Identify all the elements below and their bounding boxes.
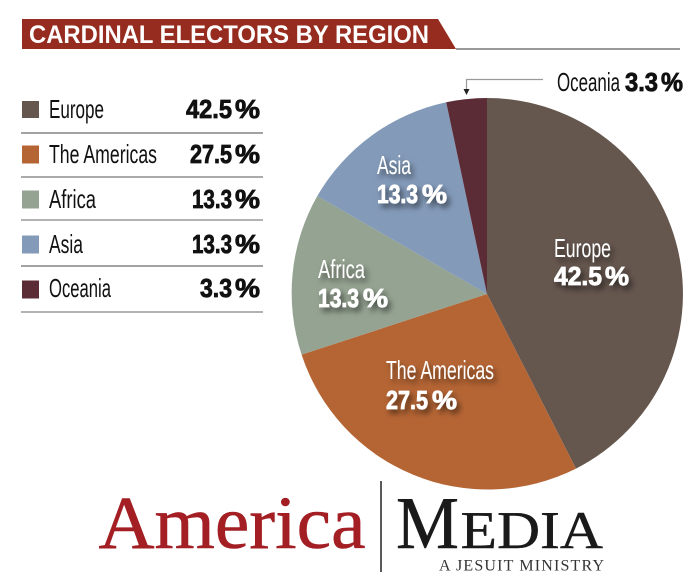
legend row: Africa: %	[235, 184, 260, 214]
callout: Oceania: %	[661, 67, 683, 97]
legend row: Asia: %	[235, 229, 260, 259]
legend row: The Americas: 27.5	[190, 139, 232, 169]
legend row: Oceania: 3.3	[200, 273, 232, 303]
callout: Oceania: 3.3	[625, 67, 658, 97]
legend row: Asia: Asia	[49, 229, 83, 259]
legend row: Africa: 13.3	[192, 184, 232, 214]
logo: America Media: EDIA	[460, 502, 603, 560]
legend row: Asia: 13.3	[192, 229, 232, 259]
legend row: Oceania: %	[235, 273, 260, 303]
pie chart	[292, 98, 683, 490]
pie label: Asia	[377, 150, 447, 209]
legend row: Oceania	[21, 273, 263, 312]
callout: Oceania	[464, 67, 683, 97]
legend row: Europe	[21, 94, 263, 133]
slice: Africa	[292, 196, 487, 355]
legend row: Oceania: Oceania	[49, 273, 111, 303]
pie label: The Americas: %	[432, 385, 457, 415]
pie label: Africa: 13.3	[318, 283, 359, 313]
legend row: Europe: 42.5	[186, 94, 232, 124]
title banner: CARDINAL ELECTORS BY REGION	[29, 21, 429, 49]
legend row: Africa: Africa	[49, 184, 96, 214]
pie label: Africa: Africa	[318, 254, 365, 284]
legend row: Asia	[21, 229, 263, 266]
slice: Asia	[317, 102, 487, 294]
legend row: The Americas: %	[235, 139, 260, 169]
legend row: Europe: Europe	[49, 94, 104, 124]
logo: America Media: America	[98, 482, 366, 565]
callout arrow	[464, 80, 543, 95]
legend row: Africa	[21, 184, 263, 220]
pie label: The Americas: The Americas	[386, 355, 494, 385]
pie label: Asia: %	[422, 179, 447, 209]
legend row: Europe: %	[235, 94, 260, 124]
pie label: Africa: %	[363, 283, 388, 313]
callout: Oceania: Oceania	[557, 67, 620, 97]
pie label: Europe: %	[605, 261, 629, 291]
legend row: The Americas: The Americas	[49, 139, 157, 169]
slice: Europe	[487, 98, 683, 469]
pie label: Europe: Europe	[554, 233, 611, 263]
slice: The Americas	[302, 294, 576, 490]
pie label: Asia: Asia	[377, 150, 411, 180]
legend row: The Americas	[21, 139, 263, 177]
pie label: The Americas	[386, 355, 494, 415]
pie label: Africa	[318, 254, 388, 313]
pie label: Europe: 42.5	[554, 261, 602, 291]
pie label: Asia: 13.3	[377, 179, 418, 209]
logo: America Media	[98, 481, 604, 574]
pie label: The Americas: 27.5	[386, 385, 428, 415]
logo: America Media: A JESUIT MINISTRY	[439, 558, 604, 574]
logo: America Media: M	[396, 483, 459, 565]
slice: Oceania	[446, 98, 487, 294]
legend table	[21, 94, 263, 312]
title banner	[22, 19, 680, 49]
pie label: Europe	[554, 233, 629, 291]
